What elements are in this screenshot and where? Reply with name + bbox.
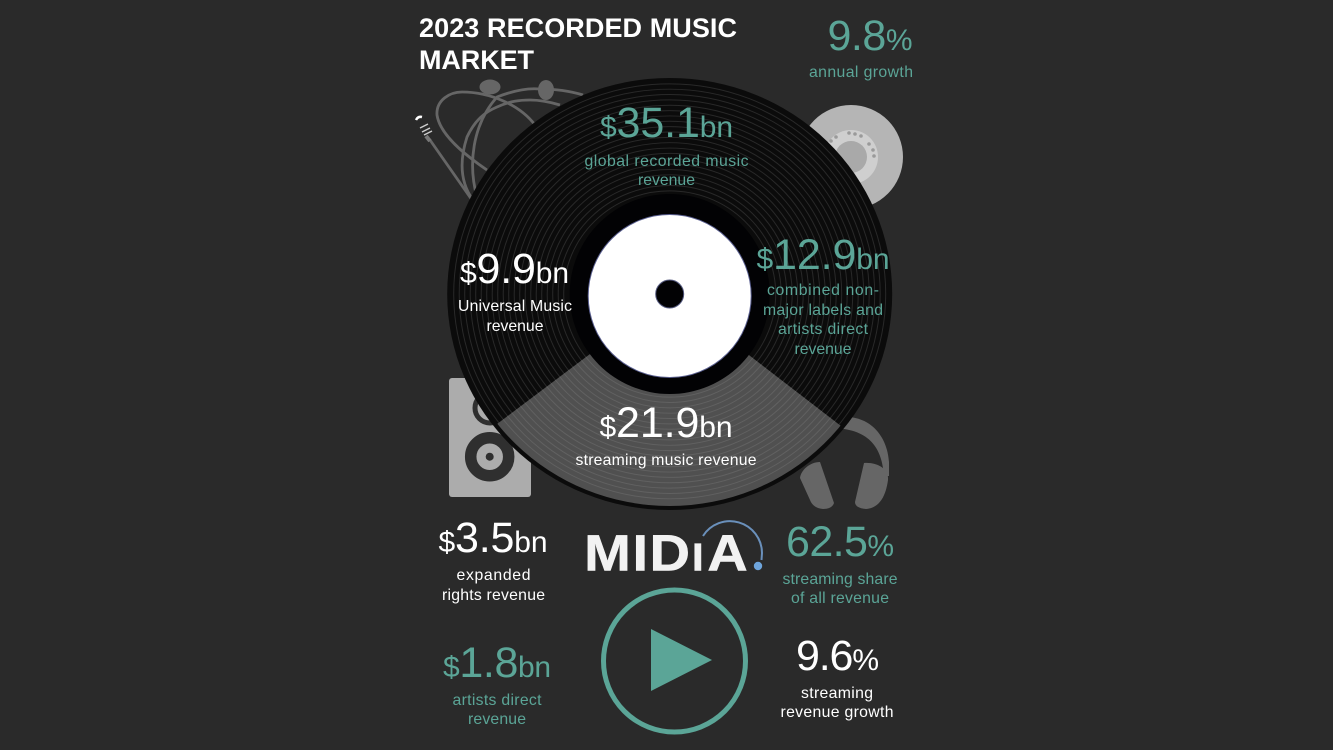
stat: expanded rights revenue: expanded	[456, 567, 530, 584]
stat: expanded rights revenue	[438, 514, 548, 604]
logo: MIDiA: M	[584, 525, 631, 582]
stat: Universal Music revenue: $9.9bn	[460, 245, 569, 293]
logo: MIDiA: I	[692, 535, 704, 579]
stat: streaming share of all revenue: streaming share	[782, 571, 898, 588]
stat: Universal Music revenue	[458, 245, 572, 335]
stat: combined non-major labels and artists direct revenue: combined non-	[767, 282, 879, 299]
stat: Universal Music revenue: revenue	[486, 318, 544, 335]
stat: annual growth: 9.8%	[828, 12, 912, 60]
logo: MIDiA	[584, 521, 762, 582]
stat: streaming music revenue: $21.9bn	[600, 399, 732, 447]
stat: expanded rights revenue: rights revenue	[442, 587, 545, 604]
icon: play button	[604, 590, 746, 732]
logo: MIDiA: A	[707, 525, 748, 582]
stat: streaming revenue growth: 9.6%	[796, 632, 879, 680]
grooves	[454, 84, 886, 504]
stat: streaming revenue growth	[780, 632, 894, 721]
stat: global recorded music revenue	[584, 99, 749, 189]
icon: headphones	[800, 417, 889, 509]
icon: compact disc	[799, 105, 903, 209]
stat: expanded rights revenue: $3.5bn	[438, 514, 548, 562]
stat: combined non-major labels and artists direct revenue	[756, 231, 890, 358]
stat: combined non-major labels and artists direct revenue: revenue	[794, 341, 852, 358]
stat: combined non-major labels and artists direct revenue: artists direct	[778, 321, 869, 338]
stat: artists direct revenue	[443, 639, 551, 728]
stat: Universal Music revenue: Universal Music	[458, 298, 572, 315]
logo: MIDiA: I	[633, 525, 648, 582]
stat: artists direct revenue: artists direct	[452, 692, 542, 709]
stat: streaming share of all revenue: 62.5%	[786, 518, 894, 566]
stat: streaming revenue growth: streaming	[801, 685, 873, 702]
stat: combined non-major labels and artists direct revenue: major labels and	[763, 302, 883, 319]
stat: streaming share of all revenue: of all revenue	[791, 590, 889, 607]
stat: combined non-major labels and artists direct revenue: $12.9bn	[756, 231, 890, 279]
stat: streaming share of all revenue	[782, 518, 898, 607]
title: 2023 RECORDED MUSIC	[419, 13, 737, 43]
vinyl record	[447, 78, 892, 510]
stat: global recorded music revenue: $35.1bn	[600, 99, 733, 147]
streaming wedge	[498, 354, 840, 506]
stat: streaming music revenue	[576, 399, 757, 469]
stat: artists direct revenue: $1.8bn	[443, 639, 551, 687]
title: MARKET	[419, 45, 534, 75]
icon: earphones	[416, 80, 583, 200]
stat: artists direct revenue: revenue	[468, 711, 526, 728]
stat: global recorded music revenue: global recorded music	[584, 153, 749, 170]
stat: global recorded music revenue: revenue	[638, 172, 695, 189]
stat: annual growth: annual growth	[809, 64, 913, 81]
stat: streaming revenue growth: revenue growth	[780, 704, 894, 721]
icon: speaker	[449, 378, 531, 497]
stat: streaming music revenue: streaming music revenue	[576, 452, 757, 469]
logo: MIDiA: D	[650, 525, 690, 582]
title	[419, 13, 737, 75]
stat: annual growth	[809, 12, 913, 81]
